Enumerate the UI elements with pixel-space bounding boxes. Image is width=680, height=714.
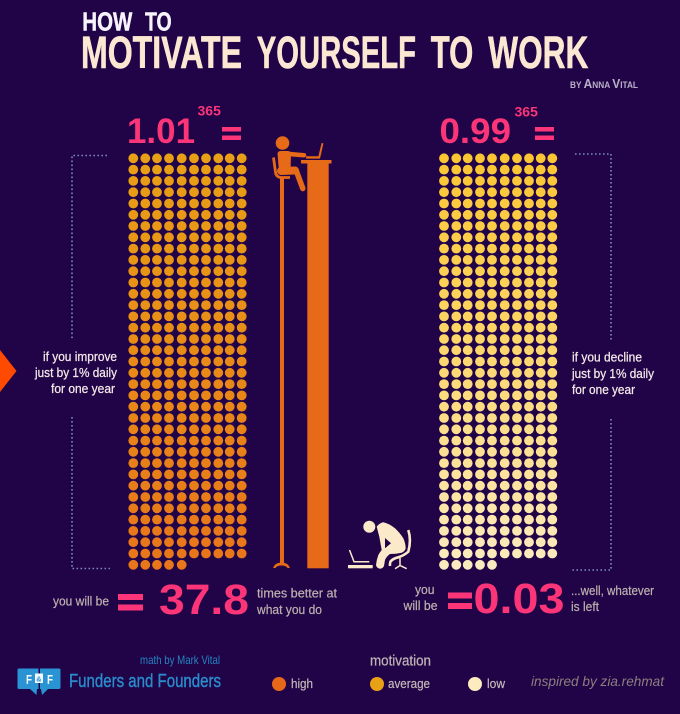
dot grid: declining, 365 days bbox=[439, 153, 558, 570]
icon: funders and founders logo: F bbox=[26, 672, 32, 687]
title line: motivate yourself to work: WORK bbox=[488, 27, 589, 78]
icon: funders and founders logo: & bbox=[36, 674, 42, 684]
left formula: 365 bbox=[198, 102, 221, 118]
right caption: just by 1% daily bbox=[571, 366, 654, 381]
left formula bbox=[127, 102, 241, 151]
arrow marker bbox=[0, 350, 16, 392]
result: you will be 0.03: ...well, whatever bbox=[571, 583, 655, 598]
left bracket bbox=[72, 156, 110, 568]
left formula: 1.01 bbox=[127, 112, 195, 151]
result: you will be 37.8: 37.8 bbox=[159, 576, 249, 624]
result: you will be 37.8: times better at bbox=[257, 586, 337, 600]
result: you will be 0.03: is left bbox=[571, 599, 599, 614]
right bracket bbox=[572, 154, 611, 570]
title line: how to: TO bbox=[145, 6, 172, 36]
right caption bbox=[571, 350, 654, 397]
result: you will be 0.03 bbox=[403, 575, 655, 623]
legend: low bbox=[468, 676, 506, 691]
right caption: if you decline bbox=[572, 350, 642, 364]
title line: motivate yourself to work bbox=[81, 27, 589, 78]
icon: person at tall desk bbox=[273, 136, 332, 568]
dot grid: improving, 365 days bbox=[128, 153, 247, 570]
right formula bbox=[440, 104, 554, 151]
result: you will be 37.8: you will be bbox=[53, 594, 109, 608]
left caption: just by 1% daily bbox=[34, 365, 117, 380]
title line: motivate yourself to work: MOTIVATE bbox=[81, 27, 242, 78]
legend: average bbox=[370, 676, 430, 691]
credit: math by: math by Mark Vital bbox=[140, 653, 220, 667]
title bbox=[81, 6, 589, 78]
legend: low: low bbox=[487, 676, 506, 691]
right formula: 0.99 bbox=[440, 112, 511, 151]
legend bbox=[272, 654, 506, 691]
left caption: for one year bbox=[51, 381, 116, 396]
title line: how to: HOW bbox=[82, 6, 133, 36]
result: you will be 0.03: you bbox=[415, 582, 434, 597]
brand name: Funders and Founders bbox=[69, 671, 221, 691]
title line: motivate yourself to work: TO bbox=[431, 27, 473, 78]
left caption bbox=[34, 349, 117, 396]
right formula: 365 bbox=[514, 104, 538, 120]
legend title: motivation bbox=[370, 654, 431, 670]
left caption: if you improve bbox=[43, 349, 117, 364]
result: you will be 0.03: 0.03 bbox=[474, 575, 564, 623]
right caption: for one year bbox=[572, 382, 636, 397]
legend: high: high bbox=[291, 676, 313, 691]
title line: motivate yourself to work: YOURSELF bbox=[257, 27, 416, 78]
icon: funders and founders logo bbox=[18, 668, 60, 695]
legend: average: average bbox=[388, 676, 430, 691]
result: you will be 37.8 bbox=[53, 576, 337, 624]
result: you will be 0.03: will be bbox=[403, 598, 438, 613]
byline: BY ANNA VITAL bbox=[570, 76, 638, 91]
icon: slumped person at laptop bbox=[348, 521, 410, 569]
credit: inspired by: inspired by zia.rehmat bbox=[531, 673, 665, 689]
icon: funders and founders logo: F bbox=[47, 672, 53, 687]
result: you will be 37.8: what you do bbox=[256, 602, 322, 617]
legend: high bbox=[272, 676, 313, 691]
